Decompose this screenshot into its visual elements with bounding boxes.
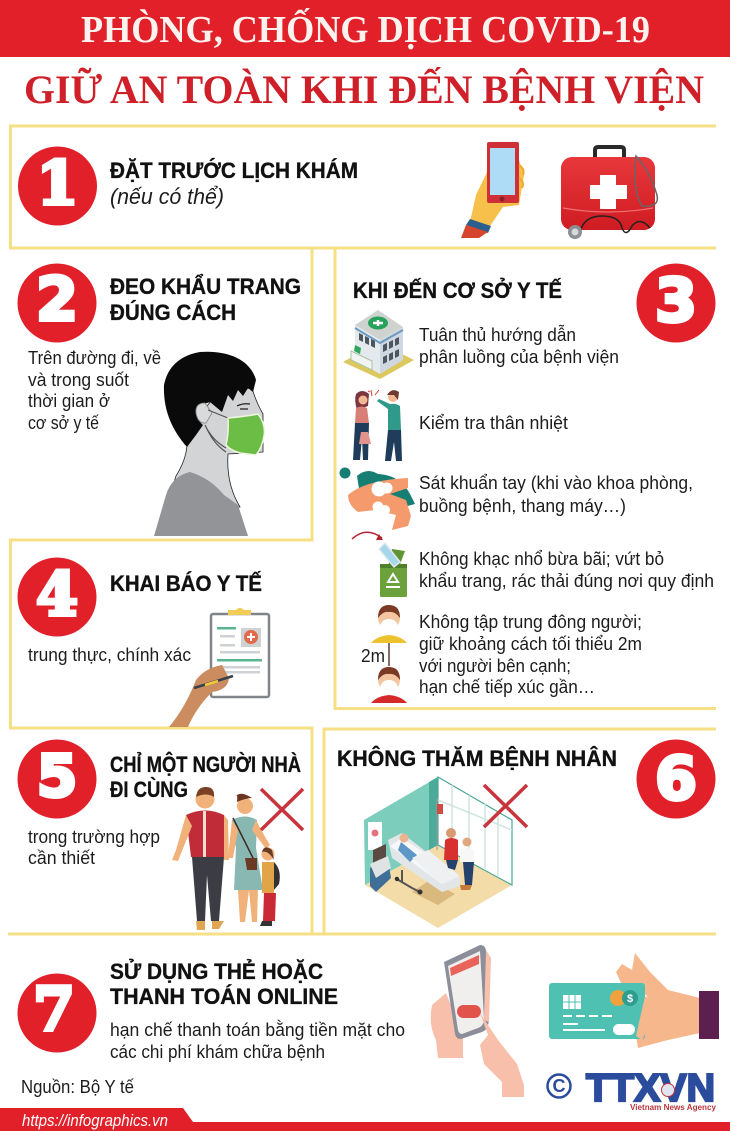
icon: hand using phone <box>431 945 524 1097</box>
header banner <box>0 0 730 57</box>
icon: hospital room with cross <box>364 777 527 928</box>
number badge 6 <box>636 740 716 818</box>
text 7: các chi phí khám chữa bệnh <box>110 1042 325 1062</box>
panel 6: no visiting patients <box>337 740 716 928</box>
icon: bin with mask <box>352 532 407 597</box>
boy <box>262 848 274 860</box>
item 3 text: Sát khuẩn tay (khi vào khoa phòng, <box>419 473 693 493</box>
number badge 3: 3 <box>655 266 697 336</box>
panel 3: at the medical facility <box>340 264 716 703</box>
icon: person in mask profile <box>154 352 264 536</box>
number badge 6: 6 <box>655 744 697 814</box>
number badge 1 <box>18 146 97 226</box>
heading 5: ĐI CÙNG <box>110 777 188 802</box>
main title: GIỮ AN TOÀN KHI ĐẾN BỆNH VIỆN <box>24 67 704 112</box>
panel 2: wear mask <box>18 264 301 536</box>
icon: family with cross <box>172 787 303 930</box>
number badge 7: 7 <box>33 975 75 1045</box>
text 5: trong trường hợp <box>28 827 160 847</box>
item 1 text: Tuân thủ hướng dẫn <box>419 324 576 345</box>
woman <box>237 798 253 814</box>
number badge 3 <box>636 264 716 342</box>
panel 1: book appointment <box>18 142 657 239</box>
icon: clipboard and hand <box>169 608 269 727</box>
icon: hand holding phone <box>461 142 524 238</box>
icon: temperature check <box>353 390 402 461</box>
text 5 <box>28 827 160 868</box>
heading 4: KHAI BÁO Y TẾ <box>110 571 262 596</box>
panel 7: card or online payment <box>18 945 719 1097</box>
heading 7 <box>110 959 338 1009</box>
panel 4: health declaration <box>18 558 269 727</box>
text 4: trung thực, chính xác <box>28 645 191 665</box>
icon: two masked people 2m apart: 2m <box>361 646 385 666</box>
number badge 5: 5 <box>37 742 77 810</box>
icon: two masked people 2m apart <box>361 605 407 703</box>
icon: hand holding card <box>549 953 719 1048</box>
TTXVN logo: Vietnam News Agency <box>630 1103 717 1112</box>
heading 7: SỬ DỤNG THẺ HOẶC <box>110 959 323 984</box>
number badge 5 <box>18 740 96 818</box>
heading 7: THANH TOÁN ONLINE <box>110 984 338 1009</box>
number badge 2: 2 <box>36 265 78 335</box>
panel frames <box>8 126 716 934</box>
item 3 text <box>419 473 693 516</box>
TTXVN logo: C <box>552 1076 566 1096</box>
heading 2: ĐEO KHẨU TRANG <box>110 274 301 299</box>
footer bar with url <box>0 1108 730 1131</box>
icon: hospital building <box>343 310 414 379</box>
text 2: Trên đường đi, về <box>28 348 161 368</box>
text 2: và trong suốt <box>28 370 129 390</box>
panel 5: one relative only <box>18 740 303 930</box>
footer bar with url: https://infographics.vn <box>22 1111 168 1130</box>
TTXVN logo: TTXVN <box>586 1067 715 1110</box>
item 5 text <box>419 612 642 697</box>
source note: Nguồn: Bộ Y tế <box>21 1077 134 1097</box>
text 7: hạn chế thanh toán bằng tiền mặt cho <box>110 1019 405 1040</box>
red cross <box>261 789 303 830</box>
item 5 text: hạn chế tiếp xúc gần… <box>419 677 595 697</box>
icon: washing hands <box>340 468 415 530</box>
item 2 text: Kiểm tra thân nhiệt <box>419 413 568 433</box>
man <box>196 790 214 808</box>
item 4 text <box>419 549 714 591</box>
text 2: cơ sở y tế <box>28 413 99 433</box>
heading 5 <box>110 752 301 802</box>
heading 1: ĐẶT TRƯỚC LỊCH KHÁM <box>110 158 358 183</box>
item 5 text: giữ khoảng cách tối thiểu 2m <box>419 634 642 654</box>
icon: hand holding card: $ <box>627 993 633 1005</box>
number badge 1: 1 <box>37 149 78 219</box>
heading 2: ĐÚNG CÁCH <box>110 300 236 325</box>
text 2: thời gian ở <box>28 391 110 411</box>
heading 2 <box>110 274 301 325</box>
number badge 7 <box>18 974 96 1052</box>
icon: medical kit with stethoscope <box>561 147 657 239</box>
number badge 2 <box>18 264 96 342</box>
number badge 4: 4 <box>36 560 78 630</box>
item 4 text: Không khạc nhổ bừa bãi; vứt bỏ <box>419 549 664 569</box>
number badge 4 <box>18 558 96 636</box>
item 1 text: phân luồng của bệnh viện <box>419 347 619 367</box>
heading 6: KHÔNG THĂM BỆNH NHÂN <box>337 746 617 771</box>
heading 3: KHI ĐẾN CƠ SỞ Y TẾ <box>353 278 562 303</box>
heading 5: CHỈ MỘT NGƯỜI NHÀ <box>110 752 301 777</box>
text 5: cần thiết <box>28 848 95 868</box>
item 3 text: buồng bệnh, thang máy…) <box>419 496 626 516</box>
header banner: PHÒNG, CHỐNG DỊCH COVID-19 <box>81 7 650 51</box>
item 4 text: khẩu trang, rác thải đúng nơi quy định <box>419 571 714 591</box>
item 5 text: Không tập trung đông người; <box>419 612 642 632</box>
text 2 <box>28 348 161 433</box>
text 7 <box>110 1019 405 1062</box>
item 1 text <box>419 324 619 367</box>
subtext 1: (nếu có thể) <box>110 184 224 209</box>
item 5 text: với người bên cạnh; <box>419 656 571 676</box>
